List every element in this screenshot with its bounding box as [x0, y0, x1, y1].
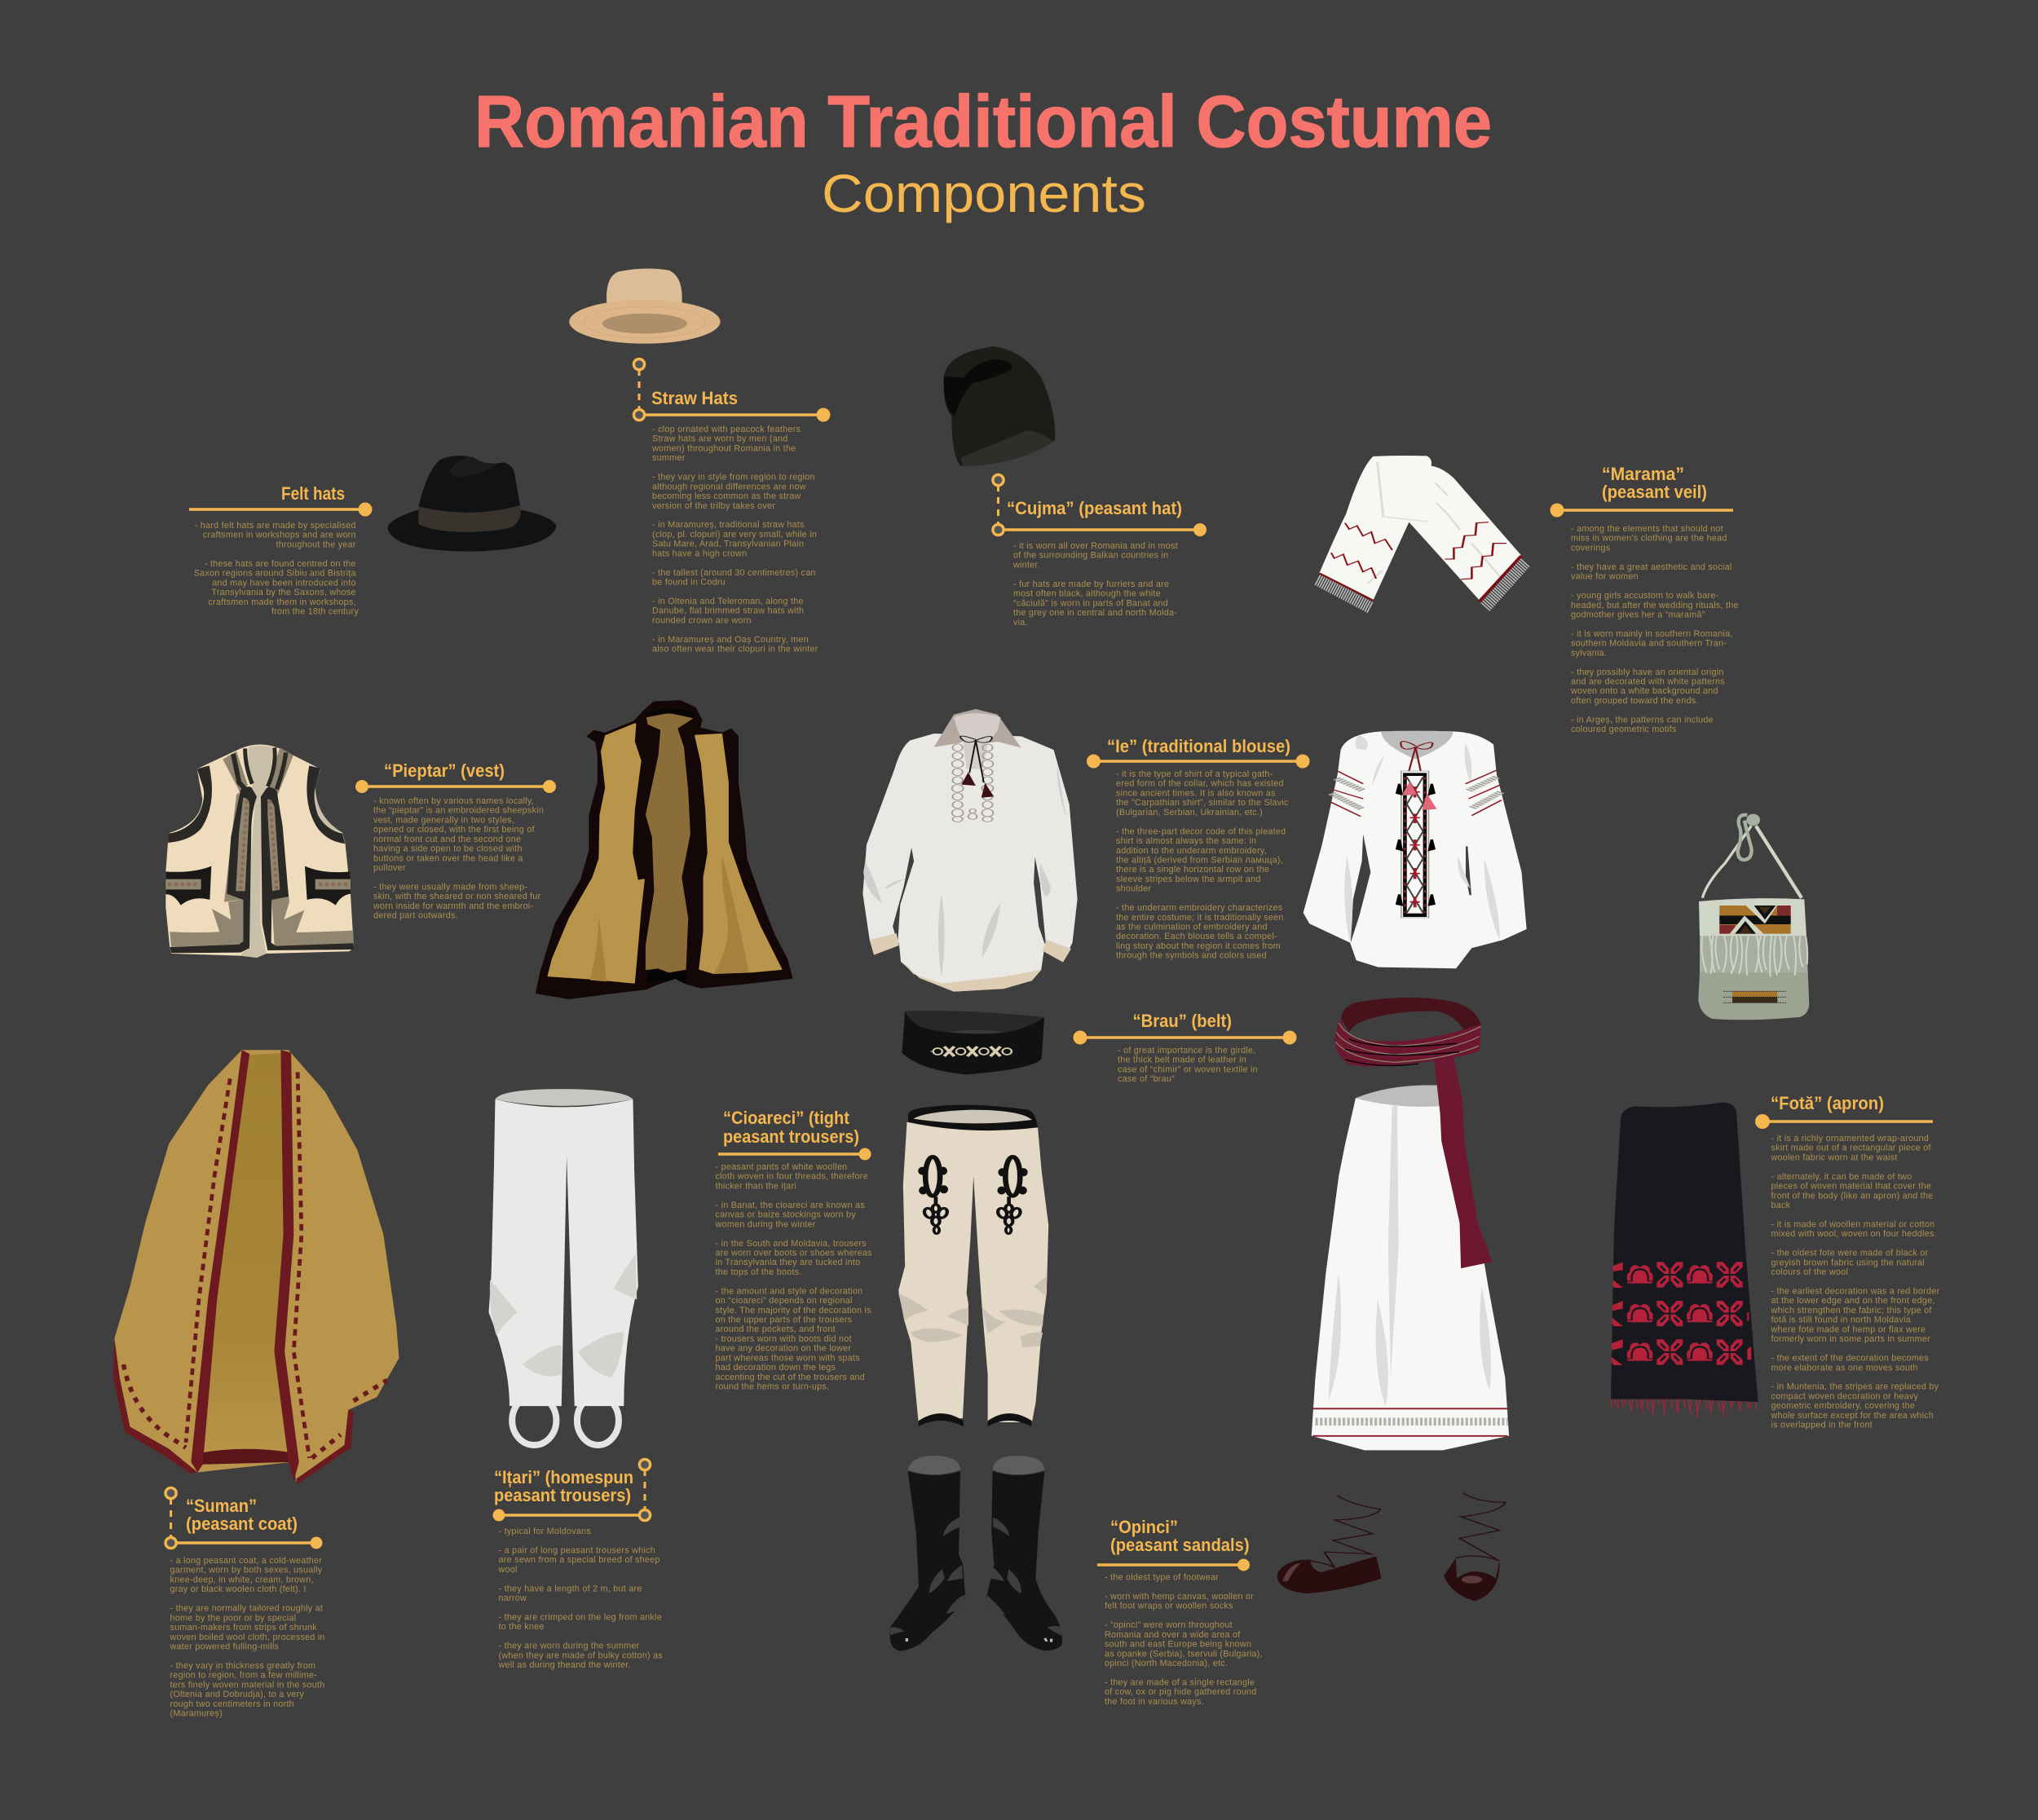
text: ie: as the culmination of embroidery and	[1116, 923, 1268, 932]
icon: sandals	[1277, 1493, 1505, 1601]
icon: marama veil	[1317, 456, 1525, 608]
text: ie: the altiță (derived from Serbian лaмuцa),	[1116, 855, 1283, 865]
text: marama: and are decorated with white patterns	[1571, 677, 1725, 687]
text: ie: - the three-part decor code of this pleated	[1116, 826, 1286, 836]
text: marama: - they possibly have an oriental origin	[1571, 668, 1724, 677]
text: pieptar: - they were usually made from sheep-	[373, 882, 527, 892]
heading: itari: peasant trousers)	[494, 1485, 631, 1505]
connector: itari	[492, 1459, 651, 1521]
text: marama: sylvania.	[1571, 648, 1607, 658]
text: itari: - typical for Moldovans	[499, 1527, 591, 1536]
panel: cujma	[993, 474, 1206, 628]
text: fota: geometric embroidery, covering the	[1771, 1401, 1915, 1411]
text: fota: more elaborate as one moves south	[1771, 1363, 1918, 1373]
icon: fur lined vest	[537, 701, 792, 998]
text: itari: - they are worn during the summer	[499, 1642, 640, 1651]
text: ie: shoulder	[1116, 884, 1152, 894]
text: opinci: - the oldest type of footwear	[1105, 1573, 1219, 1583]
text: fota: back	[1771, 1201, 1791, 1210]
icon: women's blouse	[1304, 731, 1527, 968]
text: straw hats: - in Oltenia and Teleroman, along the	[652, 597, 804, 606]
panel: ie	[1087, 736, 1309, 961]
text: fota: - it is a richly ornamented wrap-around	[1771, 1134, 1929, 1144]
text: ie: sleeve stripes below the armpit and	[1116, 875, 1261, 884]
text: opinci: as opanke (Serbia), tservuli (Bulgaria),	[1105, 1649, 1263, 1659]
icon: boots	[889, 1456, 1062, 1651]
text: cioareci: cloth woven in four threads, therefore	[716, 1172, 868, 1182]
text: cujma: of the surrounding Balkan countries in	[1013, 551, 1168, 561]
text: straw hats: - clop ornated with peacock feathers	[652, 425, 801, 434]
text: itari: wool	[497, 1565, 518, 1575]
text: pieptar: vest, made generally in two styles,	[373, 815, 514, 825]
text: ie: ling story about the region it comes from	[1116, 941, 1281, 951]
text: pieptar: the “pieptar” is an embroidered sheepskin	[373, 806, 544, 816]
text: cujma: “căciulă” is worn in parts of Banat and	[1013, 598, 1168, 608]
text: itari: well as during theand the winter.	[497, 1660, 631, 1670]
heading: itari	[494, 1467, 633, 1505]
text: itari: - they are crimped on the leg from ankle	[499, 1612, 662, 1622]
text: brau: the thick belt made of leather in	[1118, 1055, 1246, 1065]
text: fota: whole surface except for the area which	[1771, 1411, 1934, 1421]
text: fota: where fote made of hemp or flax were	[1771, 1324, 1926, 1334]
panel: felt hats	[189, 483, 372, 616]
text: fota: is overlapped in the front	[1771, 1421, 1873, 1430]
icon: embroidered vest	[165, 744, 354, 958]
icon: bag	[1698, 814, 1809, 1020]
panel: pieptar	[355, 760, 556, 921]
text: straw hats: (clop, pl. clopuri) are very small, while in	[652, 530, 817, 540]
text: straw hats: - they vary in style from region to region	[652, 473, 815, 483]
icon: itari trousers	[488, 1089, 638, 1445]
panel: fota	[1755, 1093, 1943, 1430]
text: ie: ered form of the collar, which has existed	[1116, 779, 1284, 789]
text: fota: skirt made out of a rectangular piece of	[1771, 1144, 1932, 1153]
text: straw hats: Satu Mare, Arad, Transylvanian Plain	[652, 540, 804, 549]
heading: cioareci	[723, 1108, 859, 1147]
text: marama: - it is worn mainly in southern Romania,	[1571, 629, 1733, 639]
text: marama: coloured geometric motifs	[1571, 725, 1677, 734]
text: fota: - it is made of woollen material or cotton	[1771, 1219, 1934, 1229]
text: marama: value for women	[1571, 572, 1639, 582]
text: fota: fotă is still found in north Moldavia	[1771, 1315, 1911, 1325]
text: suman: water powered fulling-mills	[170, 1642, 280, 1651]
text: cioareci: had decoration down the legs	[716, 1363, 836, 1373]
panel: opinci	[1097, 1517, 1265, 1707]
text: cioareci: round the hems or turn-ups.	[716, 1382, 829, 1392]
text: marama: godmother gives her a “maramă”	[1571, 610, 1705, 619]
text: opinci: south and east Europe being known	[1105, 1640, 1251, 1650]
text: ie: shirt is almost always the same: in	[1116, 836, 1256, 846]
text: marama: miss in women's clothing are the head	[1571, 534, 1727, 544]
text: marama: often grouped toward the ends.	[1571, 696, 1699, 706]
text: straw hats: summer	[652, 453, 686, 463]
connector: pieptar	[355, 780, 556, 793]
text: suman: (Maramureș)	[170, 1709, 223, 1719]
text: straw hats: - the tallest (around 30 centimetres) can	[652, 568, 816, 578]
heading: opinci	[1110, 1517, 1250, 1555]
icon: fota apron	[1611, 1103, 1758, 1418]
text: cioareci: around the pockets, and front	[716, 1324, 836, 1334]
connector: fota	[1755, 1114, 1933, 1129]
text: cioareci: in Transylvania they are tucked into	[716, 1258, 860, 1267]
text: felt hats: Saxon regions around Sibiu and Bistrița	[194, 569, 356, 579]
text: suman: - they vary in thickness greatly from	[170, 1661, 315, 1671]
icon: cioareci trousers	[898, 1105, 1048, 1426]
text: cujma: - fur hats are made by furriers and are	[1013, 579, 1169, 589]
text: cioareci: - in Banat, the cioareci are known as	[716, 1201, 865, 1210]
text: itari: narrow	[499, 1593, 527, 1603]
text: itari: are sewn from a special breed of sheep	[499, 1555, 660, 1565]
text: pieptar: worn inside for warmth and the embroi-	[373, 901, 534, 911]
text: marama: southern Moldavia and southern Tran-	[1571, 639, 1727, 649]
text: fota: compact woven decoration or heavy	[1771, 1391, 1919, 1401]
text: suman: knee-deep, in white, cream, brown,	[170, 1575, 314, 1584]
text: straw hats: hats have a high crown	[652, 549, 747, 558]
text: opinci: - they are made of a single rectangle	[1105, 1677, 1255, 1687]
text: straw hats: although regional differences are now	[652, 482, 806, 491]
text: felt hats: - hard felt hats are made by specialised	[195, 521, 356, 531]
text: fota: mixed with wool, woven on four heddles.	[1771, 1229, 1937, 1239]
text: straw hats: - in Maramureș, traditional straw hats	[652, 520, 805, 530]
text: fota: pieces of woven material that cover the	[1771, 1182, 1931, 1192]
icon: felt hat	[387, 456, 556, 552]
icon: leather belt	[902, 1011, 1044, 1074]
text: cioareci: have any decoration on the lower	[716, 1344, 851, 1354]
panel: itari	[492, 1459, 665, 1670]
text: ie: the "Carpathian shirt", similar to the Slavic	[1116, 798, 1289, 808]
heading: suman: (peasant coat)	[186, 1514, 298, 1534]
connector: straw hats	[633, 359, 830, 422]
text: straw hats: - in Maramureș and Oaș Country, men	[652, 635, 809, 645]
text: fota: which strengthen the fabric; this type of	[1771, 1306, 1932, 1315]
text: ie: (Bulgarian, Serbian, Ukrainian, etc.)	[1116, 808, 1263, 817]
heading: cujma: “Cujma” (peasant hat)	[1007, 498, 1182, 518]
heading: cioareci: “Cioareci” (tight	[723, 1108, 850, 1128]
text: straw hats: rounded crown are worn	[652, 615, 752, 625]
text: felt hats: and may have been introduced into	[212, 578, 356, 588]
text: opinci: felt foot wraps or woollen socks	[1105, 1602, 1233, 1611]
text: pieptar: skin, with the sheared or non sheared fur	[373, 892, 541, 901]
text: opinci: opinci (North Macedonia), etc.	[1105, 1659, 1228, 1668]
text: fota: woolen fabric worn at the waist	[1771, 1152, 1898, 1162]
title: Romanian Traditional Costume	[474, 82, 1492, 163]
text: itari: to the knee	[499, 1622, 545, 1632]
heading: opinci: “Opinci”	[1110, 1517, 1178, 1537]
heading: marama: “Marama”	[1602, 464, 1684, 484]
text: straw hats: also often wear their clopuri in the winter	[652, 645, 818, 654]
text: cujma: the grey one in central and north Molda-	[1013, 608, 1177, 618]
heading: felt hats: Felt hats	[281, 483, 345, 504]
text: felt hats: craftsmen in workshops and are worn	[203, 531, 356, 540]
text: straw hats: becoming less common as the straw	[652, 491, 801, 501]
text: brau: case of “chimir” or woven textile in	[1118, 1064, 1258, 1074]
text: fota: - the oldest fote were made of black or	[1771, 1249, 1929, 1258]
text: felt hats: - these hats are found centred on the	[205, 559, 356, 569]
text: straw hats: Danube, flat brimmed straw hats with	[652, 606, 804, 616]
text: suman: ters finely woven material in the south	[170, 1680, 324, 1690]
text: straw hats: version of the trilby takes over	[652, 501, 775, 511]
text: brau: case of “brau”	[1118, 1074, 1175, 1084]
text: itari: (when they are made of bulky cotton) as	[499, 1650, 663, 1660]
subtitle: Components	[822, 163, 1146, 223]
text: fota: colours of the wool	[1771, 1267, 1848, 1277]
panel: cioareci	[714, 1108, 875, 1392]
text: pieptar: pullover	[373, 863, 406, 873]
text: straw hats: Straw hats are worn by men (and	[652, 434, 787, 444]
heading: marama: (peasant veil)	[1602, 482, 1707, 502]
connector: cujma	[993, 474, 1206, 536]
connector: ie	[1087, 755, 1309, 768]
heading: brau: “Brau” (belt)	[1133, 1011, 1232, 1031]
heading: fota: “Fotă” (apron)	[1771, 1093, 1884, 1113]
text: fota: greyish brown fabric using the natural	[1771, 1258, 1925, 1267]
text: marama: - in Argeș, the patterns can include	[1571, 715, 1714, 725]
text: cioareci: part whereas those worn with spats	[716, 1353, 860, 1363]
text: fota: - the extent of the decoration becomes	[1771, 1354, 1929, 1364]
text: ie: through the symbols and colors used	[1116, 951, 1267, 961]
text: fota: formerly worn in some parts in summer	[1771, 1334, 1930, 1344]
text: ie: there is a single horizontal row on the	[1116, 865, 1269, 875]
text: cujma: via.	[1013, 618, 1028, 628]
icon: white skirt with sash	[1312, 1055, 1509, 1450]
connector: suman	[165, 1487, 323, 1549]
text: cioareci: on the upper parts of the trousers	[716, 1315, 853, 1325]
text: opinci: of cow, ox or pig hide gathered round	[1105, 1687, 1257, 1697]
connector: brau	[1073, 1030, 1296, 1045]
text: suman: gray or black woolen cloth (felt). I	[170, 1584, 307, 1594]
text: suman: rough two centimeters in north	[170, 1699, 294, 1709]
icon: red woven belt	[1334, 998, 1481, 1067]
text: marama: - they have a great aesthetic and social	[1571, 562, 1731, 572]
icon: suman coat	[113, 1050, 399, 1484]
text: cioareci: - in the South and Moldavia, trousers	[716, 1239, 867, 1249]
panel: marama	[1551, 464, 1741, 734]
heading: suman	[186, 1496, 298, 1534]
text: cioareci: accenting the cut of the trousers and	[716, 1373, 865, 1382]
heading: cioareci: peasant trousers)	[723, 1126, 859, 1147]
panel: straw hats	[633, 359, 830, 654]
text: cioareci: - the amount and style of decoration	[716, 1286, 862, 1296]
text: cioareci: the tops of the boots.	[716, 1267, 802, 1277]
text: straw hats: be found in Codru	[652, 578, 726, 588]
text: cioareci: - trousers worn with boots did not	[716, 1334, 852, 1344]
text: pieptar: normal front cut and the second one	[373, 835, 521, 844]
text: felt hats: from the 18th century	[271, 606, 359, 616]
text: fota: front of the body (like an apron) and the	[1771, 1191, 1933, 1201]
heading: marama	[1602, 464, 1707, 502]
text: fota: at the lower edge and on the front edge,	[1771, 1296, 1935, 1306]
text: cioareci: thicker than the ițari	[716, 1181, 796, 1191]
connector: felt hats	[189, 502, 372, 517]
heading: straw hats: Straw Hats	[651, 388, 738, 408]
text: opinci: Romania and over a wide area of	[1105, 1630, 1241, 1640]
text: marama: - young girls accustom to walk bare-	[1571, 591, 1719, 601]
text: pieptar: - known often by various names locally,	[373, 796, 534, 806]
text: ie: the entire costume; it is traditionally seen	[1116, 913, 1284, 923]
text: cioareci: on “cioareci” depends on regional	[716, 1296, 853, 1306]
text: brau: - of great importance is the girdle,	[1118, 1046, 1255, 1055]
text: cioareci: style. The majority of the decoration is	[716, 1306, 871, 1315]
text: ie: - the underarm embroidery characterizes	[1116, 903, 1283, 913]
text: ie: - it is the type of shirt of a typical gath-	[1116, 769, 1273, 779]
text: fota: - alternately, it can be made of two	[1771, 1172, 1912, 1182]
text: itari: - they have a length of 2 m, but are	[499, 1584, 642, 1593]
panel: suman	[165, 1487, 328, 1719]
text: pieptar: opened or closed, with the first being of	[373, 825, 535, 835]
text: cioareci: - peasant pants of white woollen	[716, 1162, 847, 1172]
text: opinci: - worn with hemp canvas, woollen or	[1105, 1592, 1254, 1602]
text: suman: region to region, from a few millime-	[170, 1671, 317, 1681]
text: felt hats: throughout the year	[276, 540, 356, 549]
text: opinci: - “opinci” were worn throughout	[1105, 1620, 1233, 1630]
text: pieptar: buttons or taken over the head like a	[373, 853, 523, 863]
text: itari: - a pair of long peasant trousers which	[499, 1545, 655, 1555]
text: marama: coverings	[1571, 543, 1611, 553]
text: suman: - they are normally tailored roughly at	[170, 1604, 323, 1614]
text: fota: - the earliest decoration was a red border	[1771, 1287, 1940, 1297]
icon: cujma hat	[944, 346, 1055, 467]
text: opinci: the foot in various ways.	[1105, 1697, 1204, 1707]
text: marama: headed, but after the wedding rituals, the	[1571, 601, 1739, 610]
text: felt hats: Transylvania by the Saxons, whose	[211, 588, 356, 597]
heading: itari: “Ițari” (homespun	[494, 1467, 633, 1487]
text: suman: - a long peasant coat, a cold-weather	[170, 1556, 322, 1566]
text: cujma: most often black, although the white	[1013, 589, 1161, 599]
heading: ie: “Ie” (traditional blouse)	[1107, 736, 1290, 756]
connector: cioareci	[718, 1148, 871, 1161]
heading: suman: “Suman”	[186, 1496, 257, 1516]
text: suman: home by the poor or by special	[170, 1613, 296, 1623]
text: cujma: winter.	[1012, 560, 1040, 570]
text: suman: suman-makers from strips of shrunk	[170, 1623, 317, 1633]
text: cioareci: women during the winter	[714, 1219, 816, 1229]
text: cioareci: are worn over boots or shoes whereas	[716, 1248, 872, 1258]
text: marama: woven onto a white background and	[1570, 686, 1718, 696]
heading: pieptar: “Pieptar” (vest)	[384, 760, 505, 781]
text: ie: addition to the underarm embroidery,	[1116, 846, 1267, 856]
icon: straw hat	[569, 269, 721, 344]
text: suman: woven boiled wool cloth, processed in	[170, 1633, 325, 1642]
text: pieptar: dered part outwards.	[373, 911, 458, 921]
text: felt hats: craftsmen made them in workshops,	[208, 597, 356, 607]
connector: opinci	[1097, 1558, 1250, 1571]
text: pieptar: having a side open to be closed with	[373, 844, 523, 854]
panel: brau	[1073, 1011, 1296, 1084]
text: fota: - in Muntenia, the stripes are replaced by	[1771, 1382, 1939, 1392]
text: ie: since ancient times. It is also known as	[1116, 788, 1276, 798]
text: cioareci: canvas or baize stockings worn by	[716, 1210, 856, 1220]
heading: opinci: (peasant sandals)	[1110, 1535, 1250, 1555]
text: suman: (Oltenia and Dobrudja), to a very	[170, 1690, 304, 1699]
icon: men's shirt	[862, 709, 1078, 992]
text: suman: garment, worn by both sexes, usually	[170, 1566, 323, 1575]
text: marama: - among the elements that should not	[1571, 524, 1723, 534]
connector: marama	[1551, 504, 1733, 517]
text: ie: decoration. Each blouse tells a compel-	[1116, 932, 1277, 941]
text: cujma: - it is worn all over Romania and in most	[1013, 541, 1178, 551]
text: straw hats: women) throughout Romania in the	[651, 443, 796, 453]
